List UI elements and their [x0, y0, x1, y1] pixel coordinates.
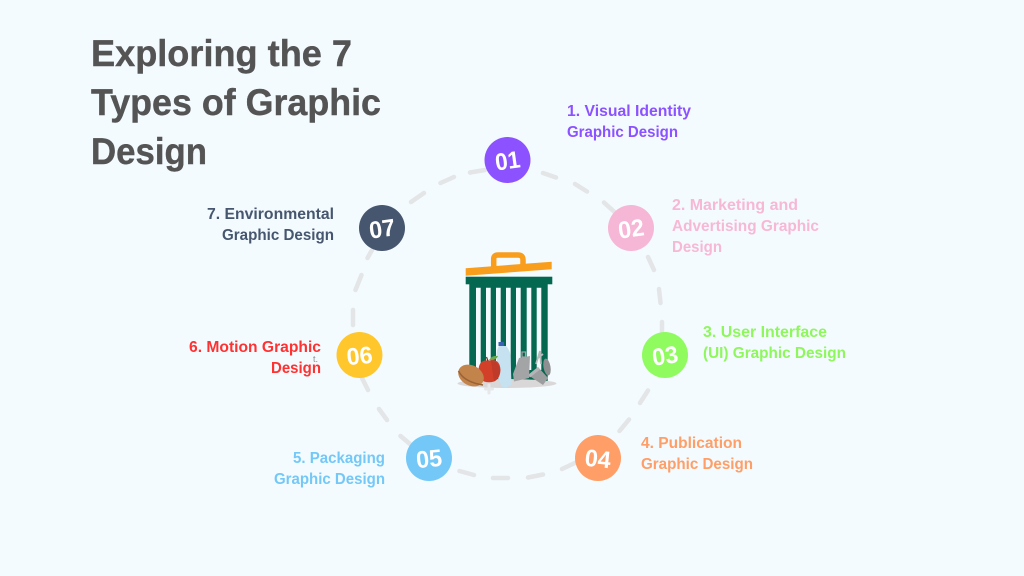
lid: [466, 262, 552, 276]
step 05 badge: [406, 435, 452, 481]
apple: [478, 356, 500, 382]
title: Types of Graphic: [91, 82, 381, 123]
step 05 label: Graphic Design: [274, 471, 385, 488]
step 06 badge: [336, 332, 382, 378]
step 02 label: Design: [672, 239, 722, 256]
step 05 label: 5. Packaging: [293, 450, 385, 467]
step 03 label: 3. User Interface: [703, 324, 827, 341]
step 06 label: [189, 339, 321, 377]
step 02 badge: [608, 205, 654, 251]
step 02 badge: 02: [616, 214, 646, 245]
faint mark under can: [486, 385, 492, 393]
step 01 badge: [484, 137, 530, 183]
ground shadow: [458, 379, 556, 388]
tin can: [513, 356, 530, 382]
step 07 badge: 07: [367, 214, 397, 245]
step 03 label: [703, 324, 846, 362]
can body: [469, 284, 548, 382]
lid handle: [494, 255, 523, 267]
step 06 label: Design: [271, 360, 321, 377]
step 07 badge: [359, 205, 405, 251]
step 03 badge: [642, 332, 688, 378]
step 02 label: [672, 197, 819, 256]
step 05 label: [274, 450, 385, 488]
step 01 badge: 01: [493, 146, 522, 177]
step 03 label: (UI) Graphic Design: [703, 345, 846, 362]
step 07 label: 7. Environmental: [207, 206, 334, 223]
step 02 label: 2. Marketing and: [672, 197, 798, 214]
stray letter: t.: [313, 354, 318, 364]
title: [91, 33, 381, 172]
step 01 label: 1. Visual Identity: [567, 103, 691, 120]
step 07 label: [207, 206, 334, 244]
step 01 label: Graphic Design: [567, 124, 678, 141]
step 04 label: 4. Publication: [641, 435, 742, 452]
step 05 badge: 05: [415, 445, 443, 474]
step 04 label: [641, 435, 753, 473]
step 01 label: [567, 103, 691, 141]
title: Exploring the 7: [91, 33, 352, 74]
bottle: [496, 346, 512, 387]
step 02 label: Advertising Graphic: [672, 218, 819, 235]
can rim: [466, 277, 552, 284]
dashed ring: [353, 170, 662, 478]
second tin can: [528, 351, 552, 385]
step 04 label: Graphic Design: [641, 456, 753, 473]
step 06 label: 6. Motion Graphic: [189, 339, 321, 356]
title: Design: [91, 131, 207, 172]
step 07 label: Graphic Design: [222, 227, 334, 244]
step 04 badge: 04: [584, 445, 613, 474]
bread loaf: [454, 360, 488, 391]
step 06 badge: 06: [345, 342, 374, 371]
step 04 badge: [575, 435, 621, 481]
step 03 badge: 03: [650, 341, 680, 372]
icon: trash can with waste: [454, 255, 556, 393]
